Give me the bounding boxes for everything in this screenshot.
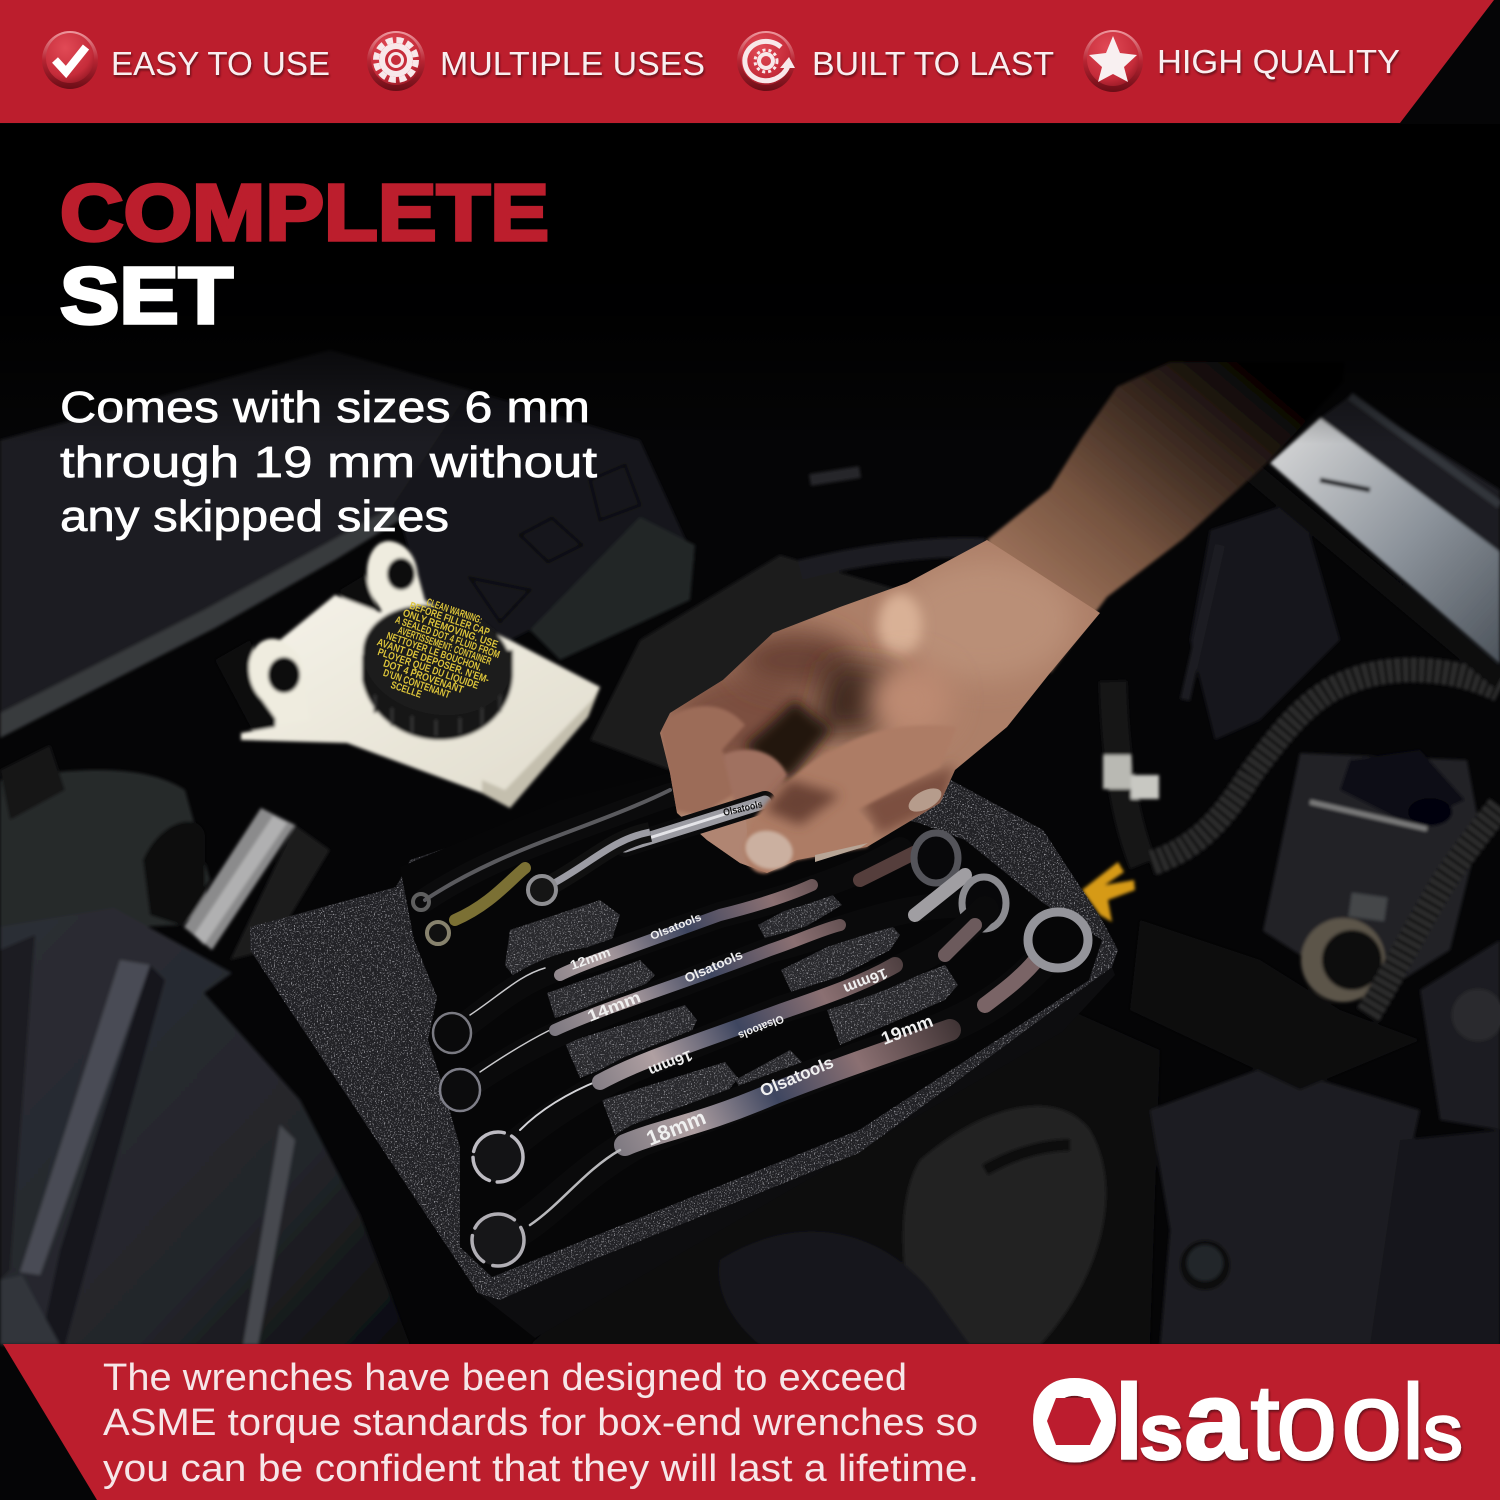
headline: SET — [60, 251, 233, 340]
upper mount ear — [367, 541, 426, 625]
metal ring — [184, 808, 295, 950]
fade into black top band — [0, 124, 1500, 444]
thumbnail — [741, 825, 797, 875]
description text: Comes with sizes 6 mm — [60, 383, 590, 432]
cap warning text: DOT 4 PROVENANT — [382, 658, 465, 696]
corrugated hoses — [1150, 670, 1500, 864]
wrench: 12 mm — [433, 833, 958, 1053]
lower right cover — [1150, 1065, 1420, 1345]
cap warning text: AVANT DE DEPOSER. N'EM- — [375, 636, 491, 686]
index finger — [660, 706, 745, 815]
tan pipe stub — [1301, 918, 1385, 1002]
bottom banner — [3, 1344, 1500, 1500]
headline — [60, 168, 549, 340]
banner text: you can be confident that they will last a lifetime. — [103, 1448, 979, 1490]
wrench: 18 and 19 mm — [472, 912, 1088, 1266]
cap warning text: NETTOYER LE BOUCHON. — [385, 630, 483, 674]
icon: check mark — [42, 31, 98, 89]
tray shadow and centre void — [530, 1010, 1160, 1345]
right mid fitting — [1130, 920, 1420, 1090]
cap warning text: BEFORE FILLER CAP — [408, 600, 491, 639]
feature: high quality: HIGH QUALITY — [1157, 44, 1400, 81]
Olsatools logo: l — [1114, 1361, 1144, 1482]
wrench: 14 mm — [440, 875, 1006, 1111]
reservoir lower lip — [482, 687, 600, 808]
cover light strips — [20, 960, 150, 1275]
wrenches — [413, 790, 1088, 1266]
Olsatools logo: s — [1139, 1387, 1184, 1476]
middle finger — [723, 750, 787, 805]
Olsatools logo: o — [1341, 1360, 1402, 1483]
hood strut top right — [1320, 396, 1500, 552]
cap warning text: PLOYER QUE DU LIQUIDE — [376, 646, 480, 692]
cap warning text — [364, 585, 510, 721]
description text: any skipped sizes — [60, 492, 449, 541]
tray side wall — [478, 967, 1115, 1338]
engine block right — [1263, 753, 1480, 1000]
feature: high quality — [1083, 30, 1400, 92]
feature: multiple uses — [367, 31, 705, 91]
wrench size and brand markings: 18mm — [643, 1106, 709, 1151]
feature: easy to use: EASY TO USE — [111, 46, 330, 83]
feature: multiple uses: MULTIPLE USES — [440, 46, 705, 83]
feature: built to last: BUILT TO LAST — [812, 46, 1054, 83]
wrench size and brand markings — [568, 911, 936, 1151]
hand back and fingers — [660, 540, 1100, 873]
gap between fingers — [745, 700, 832, 780]
wrench size and brand markings: Olsatools — [682, 947, 745, 986]
banner band — [3, 1344, 1500, 1500]
cap warning text: AVERTISSEMENT: CONTAINER — [396, 624, 493, 668]
cap — [352, 592, 522, 740]
wrench: small left pair — [413, 790, 670, 944]
banner band — [0, 0, 1494, 123]
wrench size and brand markings: 14mm — [585, 989, 643, 1026]
cap warning text: D'UN CONTENANT — [382, 667, 452, 701]
mechanic arm and hand — [528, 362, 1345, 904]
headline: COMPLETE — [60, 168, 549, 257]
tray well — [400, 770, 1102, 1277]
wrench size and brand markings: Olsatools — [736, 1012, 785, 1041]
thumb knuckle shade — [765, 780, 840, 825]
sticker on block — [1349, 893, 1387, 921]
Olsatools logo: O — [1031, 1358, 1118, 1483]
wrench: 16 mm — [473, 910, 985, 1182]
fuel line with label — [1113, 681, 1143, 864]
corrugated rubber boot — [903, 1106, 1106, 1345]
cap warning text: ONLY REMOVING. USE — [401, 607, 500, 651]
Olsatools logo: s — [1423, 1387, 1463, 1476]
feature: built to last — [737, 31, 1054, 91]
banner text: ASME torque standards for box-end wrenches so — [103, 1402, 978, 1444]
wrench size and brand markings: Olsatools — [757, 1053, 836, 1101]
cover warning icons — [470, 465, 640, 622]
mount bolts — [268, 558, 415, 693]
cover with warning icons — [392, 390, 695, 640]
yellow clip — [1082, 862, 1135, 922]
icon: gear — [367, 31, 425, 91]
ring finger and nail — [860, 765, 955, 835]
wrench size and brand markings: 16mm — [841, 964, 890, 997]
hoses upper centre — [800, 547, 985, 570]
booster dome — [1190, 500, 1340, 740]
Olsatools logo: l — [1401, 1361, 1425, 1482]
banner text: The wrenches have been designed to exceed — [103, 1357, 907, 1399]
fingernail far — [905, 784, 945, 816]
held wrench — [528, 799, 765, 904]
forefinger nail tip — [815, 843, 868, 862]
description text: through 19 mm without — [60, 438, 597, 487]
tray top surface — [250, 775, 1118, 1300]
top feature banner — [0, 0, 1494, 123]
wrench size and brand markings: Olsatools — [649, 911, 703, 943]
wrench tray — [250, 770, 1118, 1338]
cap warning text: CLEAN WARNING: — [425, 596, 484, 627]
wrench size and brand markings: 12mm — [568, 944, 612, 973]
icon: star — [1083, 30, 1143, 92]
bottom left large cover — [0, 908, 410, 1345]
black plug — [143, 821, 205, 925]
lower finger behind wrench — [680, 813, 750, 867]
feature: easy to use — [42, 31, 330, 89]
mount brackets — [215, 640, 280, 735]
Olsatools logo: t — [1250, 1361, 1280, 1482]
cap warning text: SCELLE — [389, 679, 423, 701]
reservoir body — [241, 595, 600, 808]
thumb — [743, 725, 957, 873]
hood surface upper left — [0, 350, 470, 713]
wrench size and brand markings: 19mm — [878, 1011, 936, 1049]
Olsatools logo: o — [1276, 1360, 1337, 1483]
raised bumps — [505, 888, 958, 1135]
icon: cycle arrow with gear — [737, 31, 795, 91]
held wrench: Olsatools — [722, 799, 764, 819]
brake fluid reservoir — [215, 541, 600, 808]
Olsatools logo: a — [1184, 1358, 1247, 1483]
wrench size and brand markings: 16mm — [646, 1046, 695, 1079]
lower mount ear — [249, 639, 310, 725]
forearm — [987, 362, 1345, 673]
mid cover behind tray — [590, 555, 900, 770]
description text — [60, 383, 597, 541]
banner text — [103, 1357, 979, 1490]
left dark pipework — [0, 770, 210, 950]
Olsatools logo — [1031, 1358, 1463, 1483]
cap warning text: A SEALED DOT 4 FLUID FROM — [393, 614, 502, 661]
